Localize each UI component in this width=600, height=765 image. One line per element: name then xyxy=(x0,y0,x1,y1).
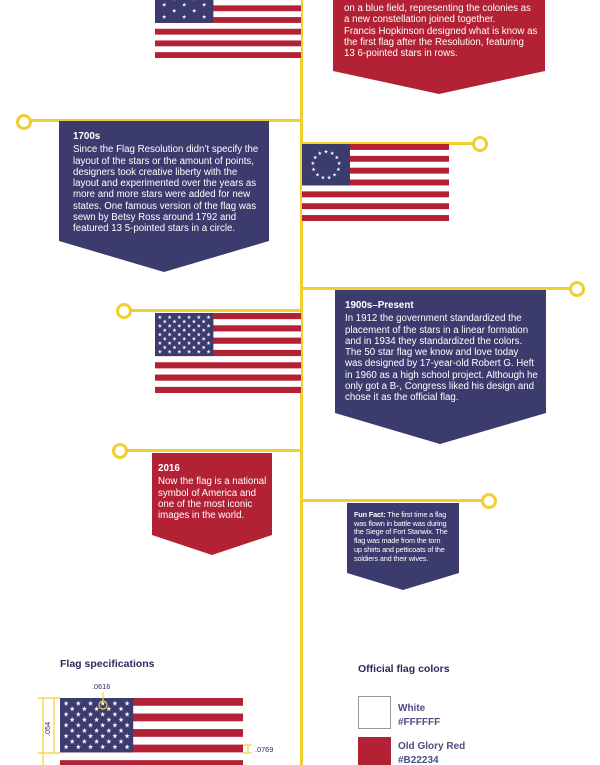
panel: fun fact: Fun Fact: The first time a flag xyxy=(354,510,446,519)
panel: 1777 red banner: 13 6-pointed stars in rows. xyxy=(344,48,458,59)
swatch: old glory red: Old Glory Red xyxy=(398,741,465,752)
connector: Betsy Ross line xyxy=(303,136,488,152)
panel: 1900s-Present blue banner: 1900s–Present xyxy=(345,300,414,311)
connector: 2016 line xyxy=(112,443,300,459)
panel: 1900s-Present blue banner: chose it as the official flag. xyxy=(345,392,458,403)
panel: 1777 red banner: Francis Hopkinson designed what is know as xyxy=(344,26,537,37)
panel: 2016 red banner xyxy=(152,453,272,555)
panel: 2016 red banner: Now the flag is a national xyxy=(158,476,266,487)
panel: fun fact: was flown in battle was during xyxy=(354,519,446,528)
panel: 1700s blue banner: sewn by Betsy Ross around 1792 and xyxy=(73,212,236,223)
panel: 2016 red banner: images in the world. xyxy=(158,510,244,521)
panel: 1700s blue banner: more and more stars were added for new xyxy=(73,189,250,200)
panel: fun fact: soldiers and their wives. xyxy=(354,554,428,563)
panel: 1900s-Present blue banner: was designed by 17-year-old Robert G. Heft xyxy=(345,358,534,369)
connector: 1900s line xyxy=(303,281,585,297)
panel: 1700s blue banner: layout and experimented over the years as xyxy=(73,178,256,189)
panel: 1900s-Present blue banner xyxy=(335,290,546,444)
timeline vertical line xyxy=(300,0,303,765)
panel: 1700s blue banner: states. One famous version of the flag was xyxy=(73,201,256,212)
chart: flag specifications diagram: .0769 xyxy=(255,745,273,754)
panel: fun fact xyxy=(347,503,459,590)
swatch: white: White xyxy=(398,703,425,714)
panel: fun fact: the Siege of Fort Stanwix. The xyxy=(354,527,448,536)
panel: 1700s blue banner: featured 13 5-pointed stars in a circle. xyxy=(73,223,235,234)
flag: Betsy Ross circle of stars xyxy=(302,144,449,221)
panel: 1900s-Present blue banner: The 50 star flag we know and love today xyxy=(345,347,518,358)
panel: 1900s-Present blue banner: and in 1934 they standardized the colors. xyxy=(345,336,522,347)
swatch: white xyxy=(358,696,440,729)
panel: 1900s-Present blue banner: In 1912 the government standardized the xyxy=(345,313,522,324)
heading: official flag colors: Official flag colors xyxy=(358,663,450,675)
panel: 1777 red banner xyxy=(333,0,545,94)
panel: 1700s blue banner: 1700s xyxy=(73,131,100,142)
swatch: old glory red xyxy=(358,737,465,765)
heading: flag specifications: Flag specifications xyxy=(60,658,155,670)
panel: 2016 red banner: 2016 xyxy=(158,463,180,474)
panel: 1900s-Present blue banner: placement of the stars in a linear formation xyxy=(345,325,528,336)
panel: 1700s blue banner: designers took creative liberty with the xyxy=(73,167,237,178)
chart: flag specifications diagram: .054 xyxy=(43,722,52,736)
connector: fun fact line xyxy=(303,493,497,509)
panel: 1777 red banner: on a blue field, representing the colonies as xyxy=(344,3,531,14)
connector: 50-star flag line xyxy=(116,303,300,319)
panel: 1700s blue banner xyxy=(59,121,269,272)
panel: 1900s-Present blue banner: only got a B-, Congress liked his design and xyxy=(345,381,534,392)
panel: fun fact: flag was made from the torn xyxy=(354,536,440,545)
flag: 1777 13 stars in rows xyxy=(155,0,301,58)
panel: 2016 red banner: one of the most iconic xyxy=(158,499,252,510)
panel: 1777 red banner: a new constellation joined together. xyxy=(344,14,495,25)
panel: 2016 red banner: symbol of America and xyxy=(158,488,256,499)
flag: 50 stars xyxy=(155,313,301,393)
panel: 1700s blue banner: Since the Flag Resolution didn’t specify the xyxy=(73,144,258,155)
swatch: white: #FFFFFF xyxy=(398,717,440,728)
chart: flag specifications diagram xyxy=(38,682,273,765)
panel: fun fact: up shirts and petticoats of the xyxy=(354,545,445,554)
panel: 1700s blue banner: layout of the stars or the amount of points, xyxy=(73,156,254,167)
panel: 1777 red banner: the first flag after the Resolution, featuring xyxy=(344,37,524,48)
chart: flag specifications diagram: .0616 xyxy=(92,682,110,691)
panel: 1900s-Present blue banner: in 1960 as a high school project. Although he xyxy=(345,370,538,381)
connector: 1700s line xyxy=(16,114,300,130)
